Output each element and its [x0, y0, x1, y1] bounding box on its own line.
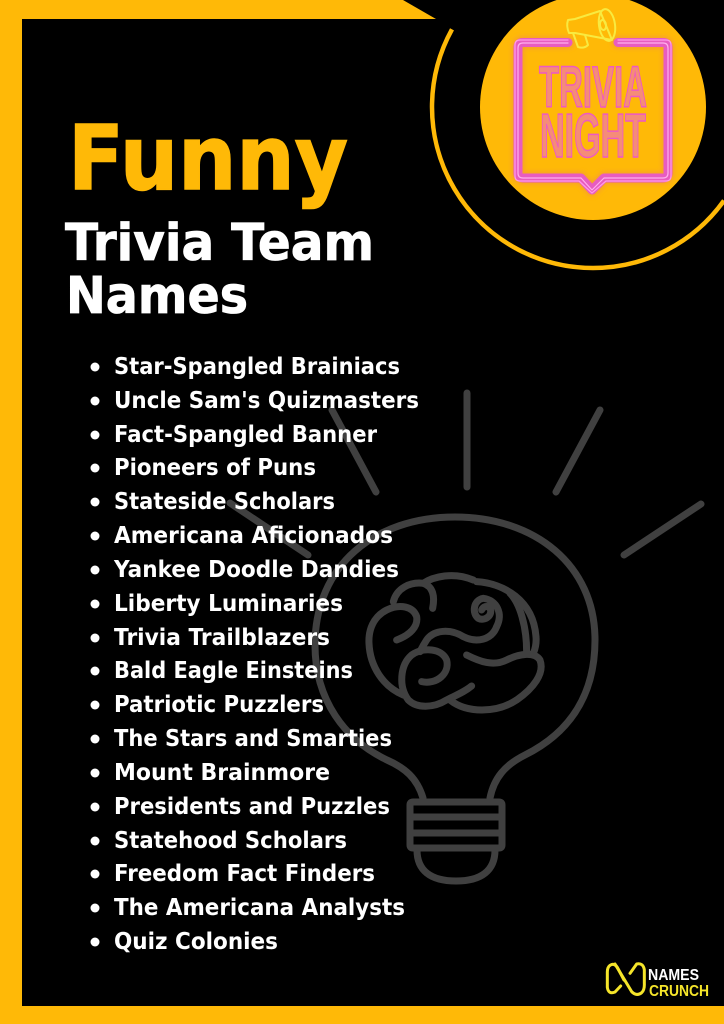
- icon: neon megaphone: [567, 8, 617, 48]
- logo text: crunch: CRUNCH: [649, 983, 709, 1000]
- icon: light bulb with brain: [230, 393, 701, 881]
- list of team names: Quiz Colonies: [114, 927, 278, 955]
- list of team names: Star-Spangled Brainiacs: [114, 352, 400, 380]
- neon speech frame: [515, 40, 671, 193]
- list of team names: Patriotic Puzzlers: [114, 690, 324, 718]
- title: [65, 106, 374, 326]
- title: names: Names: [66, 267, 248, 326]
- title: trivia team: Trivia Team: [65, 214, 374, 273]
- list bullets: [90, 362, 100, 946]
- list of team names: Liberty Luminaries: [114, 589, 343, 617]
- logo text: names: NAMES: [648, 967, 699, 984]
- list of team names: Pioneers of Puns: [114, 453, 316, 481]
- list of team names: The Americana Analysts: [114, 893, 405, 921]
- neon text: trivia: TRIVIA: [539, 55, 647, 120]
- title: funny: Funny: [68, 106, 348, 210]
- list of team names: Presidents and Puzzles: [114, 792, 390, 820]
- list of team names: [90, 352, 419, 955]
- list of team names: Uncle Sam's Quizmasters: [114, 386, 419, 414]
- list of team names: Freedom Fact Finders: [114, 859, 375, 887]
- badge: trivia night: [480, 0, 706, 220]
- list of team names: Trivia Trailblazers: [114, 623, 330, 651]
- list of team names: Stateside Scholars: [114, 487, 335, 515]
- logo: names crunch: [607, 964, 709, 1000]
- list of team names: Fact-Spangled Banner: [114, 420, 377, 448]
- list of team names: Yankee Doodle Dandies: [113, 555, 399, 583]
- list of team names: Mount Brainmore: [114, 758, 330, 786]
- list of team names: Americana Aficionados: [114, 521, 393, 549]
- list of team names: Statehood Scholars: [114, 826, 347, 854]
- logo icon: N mark: [607, 964, 644, 994]
- badge circle: [480, 0, 706, 220]
- ring arc around badge: [432, 29, 724, 268]
- list of team names: The Stars and Smarties: [114, 724, 392, 752]
- list of team names: Bald Eagle Einsteins: [114, 656, 353, 684]
